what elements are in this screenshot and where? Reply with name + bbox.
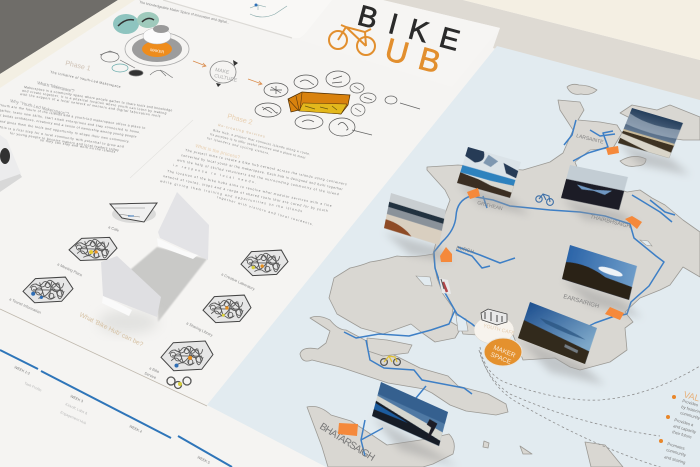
panel: top sheet: The knowledgeable Maker Space of innovation and digital... bbox=[139, 0, 230, 25]
text block: phase 2 intro: for islanders and cycling visitors. bbox=[207, 136, 270, 155]
heading: what is makerspace: What is "Makerspace"? bbox=[37, 80, 75, 94]
text block: process paragraph: with the help of skilled volunteers and the surrounding community of the island bbox=[177, 158, 339, 196]
label: a meeting place: a Meeting Place bbox=[57, 262, 83, 277]
text: phase 2 subtitle: Re-creating Services bbox=[218, 123, 266, 139]
hexagon: bike service bbox=[160, 341, 214, 371]
text block: why paragraph: It builds confidence, creativity and a sense of ownership among young people bbox=[0, 113, 137, 139]
icon: container cafe bbox=[110, 203, 157, 223]
text block: phase 2 intro: Bike Hub, a project that connects islands along a route. bbox=[213, 128, 311, 156]
map: islands bbox=[300, 84, 700, 467]
marker: youth cafe circle: YOUTH CAFE bbox=[483, 323, 516, 337]
text: week notes: Task Profile bbox=[24, 381, 42, 392]
paper model: shadow slab bbox=[130, 247, 207, 322]
label: map place names: BHATARSAIGH bbox=[317, 421, 377, 464]
heading: what is the process: What is the process? bbox=[194, 143, 241, 161]
sketch: small icons around circle bbox=[100, 51, 172, 78]
icon: orange container bbox=[288, 92, 350, 114]
text: values list: Provides a bbox=[674, 417, 695, 428]
text block: phase 2 intro: Its purpose is to offer useful services and a place to meet bbox=[210, 132, 306, 160]
hexagon: creative laboratory bbox=[240, 250, 289, 276]
diagram: maker culture ring: MAKE bbox=[215, 67, 230, 76]
heading: what bike hub can be: What 'Bike Hub' can be? bbox=[78, 312, 144, 349]
text: week notes: Engagement Hub bbox=[60, 410, 87, 425]
heading: why youth-led makerspace: Why "Youth-Led Makerspace"? bbox=[10, 98, 70, 117]
text block: why paragraph bbox=[0, 103, 146, 154]
text block: makerspace paragraph: with the support of a local network of mentors and digital fabrication tools bbox=[20, 92, 161, 118]
marker: maker space circle: MAKER bbox=[492, 344, 517, 360]
panel: bike hub title card bbox=[300, 0, 500, 87]
arrow bbox=[248, 79, 262, 85]
diagram: maker culture ring bbox=[210, 60, 238, 87]
text block: why paragraph: This is a first step for a rural community with potential to grow and bbox=[0, 125, 124, 149]
text: values list: and sharing bbox=[664, 454, 687, 465]
text: week labels: WEEK 1-2 bbox=[14, 365, 31, 376]
photo: dark shore with mist bbox=[561, 165, 628, 210]
text: week labels: WEEK 5 bbox=[197, 455, 211, 465]
photo: blue sky hill bbox=[562, 245, 637, 300]
text: week labels: WEEK 4 bbox=[129, 424, 143, 434]
text: phase 1 subtitle: The Initiative of Youth-Led Makerspace bbox=[50, 70, 121, 89]
text: values list: their future bbox=[672, 429, 693, 440]
diagram: maker space circle bbox=[125, 25, 189, 66]
arrow bbox=[193, 61, 206, 67]
title: BIKE: BIKE bbox=[354, 0, 463, 58]
heading: phase 1: Phase 1 bbox=[65, 60, 91, 73]
photo shadows on map bbox=[372, 143, 690, 467]
icon: red bicycle standee bbox=[439, 278, 451, 294]
text block: process paragraph: converted by local youth at the makerspace. Each hub is designed and built together bbox=[181, 153, 344, 191]
photo: clouds over blue sea bbox=[457, 147, 521, 198]
text block: process paragraph bbox=[160, 148, 347, 227]
diagram: service circles bbox=[255, 71, 355, 136]
text: week notes: Kickoff, Labs & bbox=[65, 402, 89, 416]
panel: what bike hub can be bbox=[9, 203, 289, 388]
text: values list: community bbox=[680, 410, 700, 421]
text block: process paragraph: The location of the bike hubs aims to resolve what modular services with a fine bbox=[167, 169, 332, 208]
text block: makerspace paragraph: and create together. It is a physical location where youth can learn by making bbox=[22, 89, 167, 115]
text: values list bbox=[659, 389, 700, 465]
title: HUB with bicycle icon: UB bbox=[381, 31, 445, 80]
diagram: maker culture ring: CULTURE bbox=[214, 73, 238, 84]
marker: hub building icon bbox=[481, 309, 507, 325]
label: map place names: THAIRBHSAIGH bbox=[590, 214, 631, 230]
sketch: small service labels top bbox=[350, 83, 420, 135]
map: water cut-outs bbox=[416, 240, 652, 331]
photo: top right stormy beach bbox=[618, 108, 683, 158]
map panel bbox=[207, 46, 700, 467]
label: map place names: LARSAINTE bbox=[576, 133, 605, 146]
text block: process paragraph: network of routes, stops and a range of shared tools that are cared for by youth bbox=[163, 174, 328, 213]
background: dark floor bbox=[0, 0, 118, 74]
panel: timeline bbox=[0, 309, 232, 467]
photo: coastal town at dusk bbox=[518, 302, 597, 364]
label: map place names: GRITHEAN bbox=[477, 200, 503, 212]
label: a bike service bbox=[144, 366, 160, 380]
hexagon: tourist information bbox=[22, 277, 74, 303]
text block: process paragraph: The project aims to create a bike hub network across the islands using containers bbox=[185, 148, 347, 186]
label: map place names bbox=[317, 133, 631, 464]
paper model: front house bbox=[101, 256, 161, 317]
text block: why paragraph: so they can stay and work on the islands bbox=[40, 138, 116, 154]
timeline bar bbox=[0, 350, 232, 467]
text block: why paragraph: for young people to become makers and local leaders today bbox=[10, 131, 120, 152]
icon: blue bicycle bbox=[536, 194, 553, 205]
label: a cafe: a Cafe bbox=[108, 225, 120, 233]
map: cycle routes bbox=[344, 120, 675, 456]
hexagon: sharing library bbox=[202, 295, 252, 323]
panel: phase 1 and phase 2 text panel bbox=[0, 12, 420, 227]
background: beige table strip bbox=[383, 0, 700, 110]
hexagon: meeting place bbox=[69, 237, 117, 261]
diagram: maker space circle: MAKER bbox=[150, 47, 165, 54]
text block: why paragraph: Youth are the future of the islands and a youth-led makerspace offers a place to bbox=[0, 103, 146, 130]
text: week notes bbox=[24, 381, 89, 425]
label: a bike service: a Bike bbox=[149, 366, 160, 374]
label: a bike service: Service bbox=[144, 371, 157, 380]
paper model: back house bbox=[157, 192, 209, 260]
background: poster board edge bbox=[0, 0, 135, 88]
marker: orange tags bbox=[338, 146, 642, 436]
text block: makerspace paragraph: Makerspace is a community space where people gather to share tools and knowledge bbox=[24, 85, 173, 112]
icon: yellow bicycle bbox=[381, 356, 400, 365]
photo: sand and sign bbox=[372, 382, 448, 446]
text block: process paragraph: together with visitors and local residents. bbox=[217, 195, 314, 227]
paper model: soft shadow bbox=[98, 310, 158, 334]
text block: process paragraph: while giving them training and opportunities on the islands bbox=[160, 179, 303, 213]
title: HUB with bicycle icon bbox=[329, 25, 445, 80]
label: map place names: BURGH bbox=[456, 245, 475, 255]
marker: maker space circle: SPACE bbox=[489, 351, 512, 366]
label: map place names: EARSAIRIGH bbox=[562, 294, 600, 310]
text: values list: Promotes bbox=[667, 441, 685, 451]
panel: top sheet bbox=[139, 0, 345, 38]
label: a creative laboratory: a Creative Laboratory bbox=[221, 272, 255, 291]
icon: bikes sketch bbox=[167, 377, 191, 388]
text: week labels: WEEK 3 bbox=[70, 394, 84, 403]
text: values list: and capacity bbox=[673, 423, 698, 435]
text block: why paragraph: and gives them the tools and opportunity to shape their own community. bbox=[0, 119, 130, 144]
marker: hub stamp and circles bbox=[474, 309, 522, 366]
map: dashed sea routes bbox=[479, 347, 700, 467]
heading: phase 2: Phase 2 bbox=[226, 113, 253, 127]
background: cream wall bbox=[463, 0, 700, 60]
label: a tourist information: a Tourist Information bbox=[9, 297, 42, 315]
photo: grey beach with orange rock bbox=[384, 193, 446, 245]
marker: maker space circle bbox=[484, 338, 522, 366]
label: a sharing library: a Sharing Library bbox=[186, 321, 213, 338]
text block: why paragraph: gather, learn new skills, start small enterprises and stay connected to home. bbox=[0, 108, 141, 134]
text: values list: community bbox=[666, 447, 687, 458]
paper model: left fragment bbox=[0, 135, 22, 192]
sketch: teal team circles bbox=[113, 12, 159, 34]
text block: process paragraph: in response to local needs. bbox=[173, 163, 257, 185]
text: week labels bbox=[14, 365, 211, 465]
text: values list: Provides bbox=[682, 398, 699, 407]
